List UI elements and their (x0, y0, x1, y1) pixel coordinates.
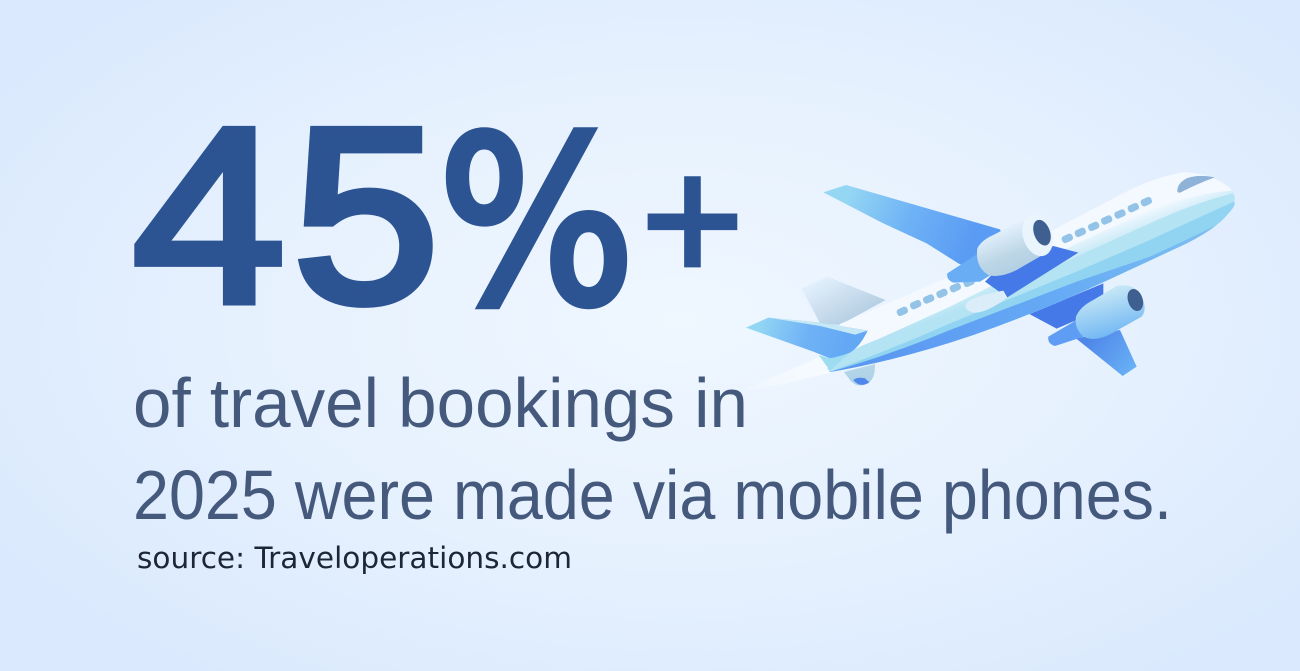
description text (133, 364, 1172, 534)
engine one nacelle (977, 219, 1048, 276)
headline statistic: 45%+: + (641, 120, 744, 319)
headline statistic: 45%+: 5 (293, 76, 439, 354)
headline statistic: 45%+ (133, 76, 744, 357)
tail fin (802, 277, 886, 325)
far wing (823, 185, 1013, 277)
wing root underside (1029, 283, 1103, 329)
tailplane (746, 318, 868, 358)
description text: 2025 were made via mobile phones. (133, 456, 1172, 534)
fuselage sky band (829, 202, 1235, 372)
wing over fuselage (985, 246, 1078, 297)
passenger windows (896, 196, 1153, 317)
fuselage soft shading (827, 191, 1235, 372)
contrail (740, 357, 835, 392)
belly fairing (844, 364, 875, 385)
tail cone (819, 353, 850, 371)
headline statistic: 45%+: % (438, 90, 635, 357)
engine two nacelle (1076, 285, 1145, 339)
engine two pylon (1048, 320, 1093, 346)
engine one pylon (947, 253, 993, 283)
description text: of travel bookings in (133, 364, 748, 442)
cockpit window (1177, 176, 1215, 193)
icon: airplane (740, 172, 1235, 392)
headline statistic: 45%+: 4 (133, 76, 285, 354)
fuselage cyan band (827, 193, 1235, 372)
near wing lower section (1076, 330, 1137, 376)
engine one intake (1017, 211, 1058, 260)
source line: source: Traveloperations.com (137, 541, 572, 575)
fuselage (819, 172, 1234, 372)
engine two intake (1125, 287, 1146, 313)
fuselage blue belly (829, 225, 1217, 372)
wing fairing (965, 291, 1007, 313)
